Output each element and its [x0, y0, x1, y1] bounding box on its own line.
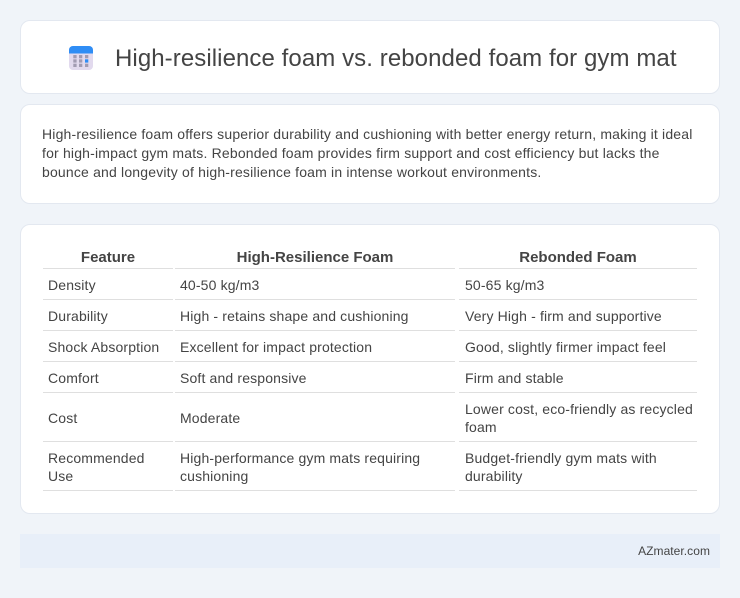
- row: cost: Moderate: [180, 410, 240, 426]
- table header: Feature: [81, 249, 135, 266]
- row: comfort: [48, 370, 564, 386]
- row: durability: Durability: [48, 308, 108, 324]
- row: cost: foam: [465, 419, 497, 435]
- row: durability: Very High - firm and supportive: [465, 308, 662, 324]
- row: shock absorption: [48, 339, 666, 355]
- row: recommended use: Use: [48, 468, 73, 484]
- row: comfort: Firm and stable: [465, 370, 564, 386]
- table header: [81, 249, 637, 266]
- row: shock absorption: Shock Absorption: [48, 339, 159, 355]
- panel: description: [20, 104, 720, 204]
- row: cost: Lower cost, eco-friendly as recycled: [465, 401, 693, 417]
- row: shock absorption: Good, slightly firmer impact feel: [465, 339, 666, 355]
- text block: summary: High-resilience foam offers superior durability and cushioning with better energy return, making it ideal: [42, 126, 693, 142]
- title: High-resilience foam vs. rebonded foam for gym mat: [115, 45, 677, 72]
- row: density: 40-50 kg/m3: [180, 277, 259, 293]
- text block: summary: [42, 126, 693, 180]
- row: recommended use: Budget-friendly gym mats with: [465, 450, 657, 466]
- row: recommended use: Recommended: [48, 450, 145, 466]
- row: density: Density: [48, 277, 96, 293]
- row: density: [48, 277, 544, 293]
- row: shock absorption: Excellent for impact protection: [180, 339, 372, 355]
- row: recommended use: durability: [465, 468, 523, 484]
- panel: comparison table: [20, 224, 720, 514]
- table header: High-Resilience Foam: [237, 249, 393, 266]
- row: comfort: Comfort: [48, 370, 99, 386]
- icon: calendar: [69, 46, 93, 70]
- row: density: 50-65 kg/m3: [465, 277, 544, 293]
- table header: Rebonded Foam: [519, 249, 637, 266]
- row: recommended use: [48, 450, 657, 484]
- footer bar: [20, 534, 720, 568]
- text block: summary: bounce and longevity of high-resilience foam in intense workout environments.: [42, 164, 541, 180]
- row: durability: [48, 308, 662, 324]
- text block: summary: for high-impact gym mats. Rebonded foam provides firm support and cost efficiency but lacks the: [42, 145, 660, 161]
- row: comfort: Soft and responsive: [180, 370, 307, 386]
- row: cost: [48, 401, 693, 435]
- footer credit: AZmater.com: [638, 544, 710, 558]
- panel: header: [20, 20, 720, 94]
- row: durability: High - retains shape and cushioning: [180, 308, 409, 324]
- row: cost: Cost: [48, 410, 77, 426]
- row: recommended use: cushioning: [180, 468, 248, 484]
- row: recommended use: High-performance gym mats requiring: [180, 450, 420, 466]
